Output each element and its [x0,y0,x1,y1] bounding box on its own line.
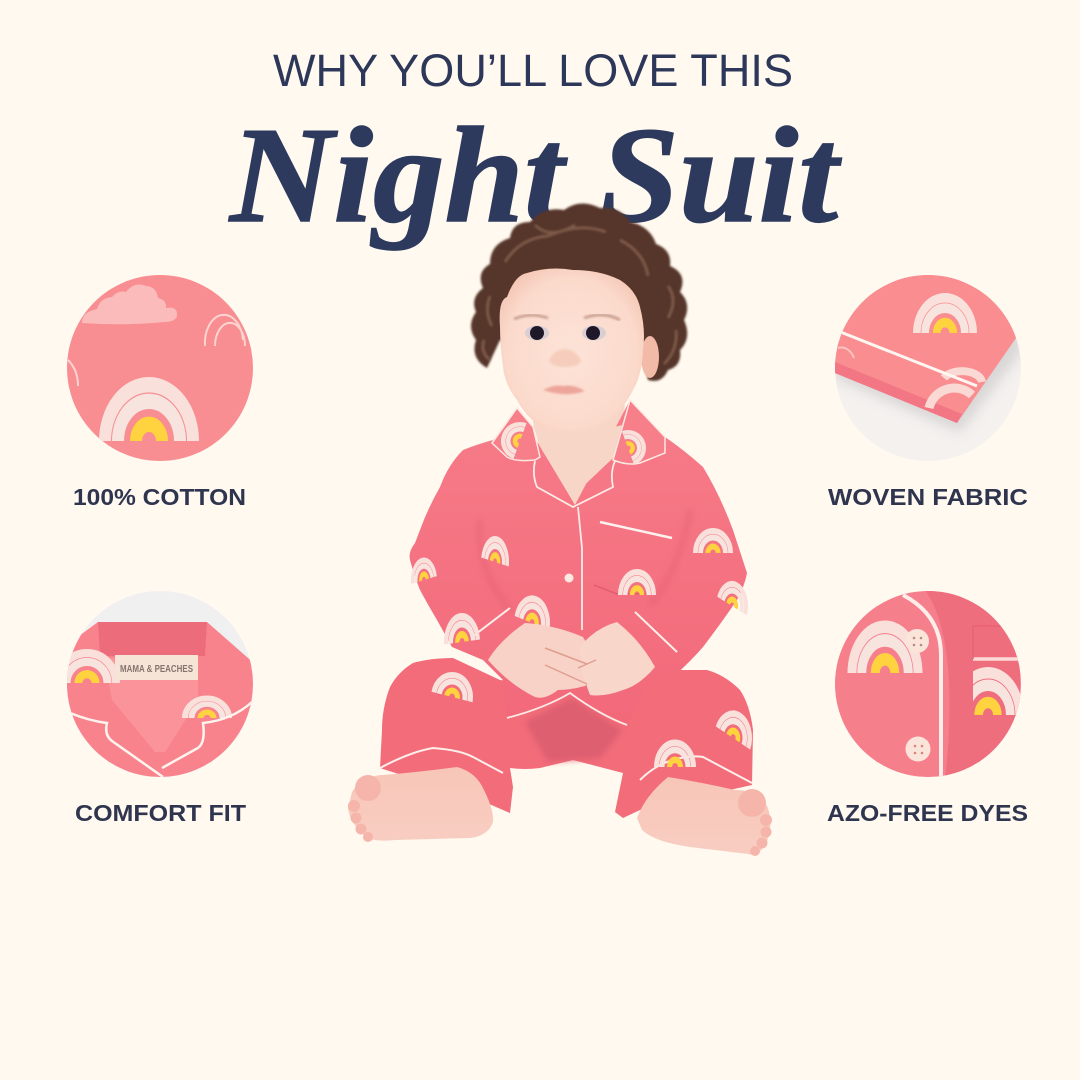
mouth [543,386,585,394]
sleeve fold shadows [480,510,690,610]
lapels piping [507,461,627,725]
crotch shading [525,698,622,762]
shirt and sleeves [410,400,747,725]
pants [380,658,753,818]
button [564,574,574,582]
pocket [600,522,672,538]
neck [530,405,625,505]
right foot [637,777,772,856]
brand tag [115,655,198,680]
title: why you'll love this: WHY YOU’LL LOVE THIS [273,45,793,96]
fabric swatch: placket with buttons [835,591,1021,777]
label: woven fabric: WOVEN FABRIC [828,484,1028,510]
nose [549,349,581,367]
ear [641,336,659,378]
eyes [525,326,606,340]
hands [488,622,655,698]
title: night suit: Night Suit [228,99,842,251]
fabric swatch: folded sleeve [835,275,1021,461]
label: comfort fit: COMFORT FIT [75,800,246,826]
cuff and hem piping [380,608,752,783]
collar left [492,408,540,461]
v-neck skin [533,425,622,497]
eyebrows [514,315,620,320]
panel: 100% cotton [67,275,253,505]
panel: azo-free dyes [827,585,1030,826]
brand tag: MAMA & PEACHES [120,664,193,675]
baby in pink night suit [348,203,772,856]
panel: comfort fit [67,591,253,821]
fabric swatch: collar with brand tag [67,591,253,777]
hair [471,203,687,381]
fabric swatch: cloud and rainbow [67,275,253,461]
pocket edge [594,585,655,594]
hair curls [483,225,676,364]
label: 100% cotton: 100% COTTON [73,484,246,510]
panel: woven fabric [828,270,1030,510]
suit rainbows [411,420,755,767]
label: azo-free dyes: AZO-FREE DYES [827,800,1028,826]
left foot [348,767,493,842]
face [500,269,644,432]
collar right [613,400,665,464]
buttons [905,629,930,762]
